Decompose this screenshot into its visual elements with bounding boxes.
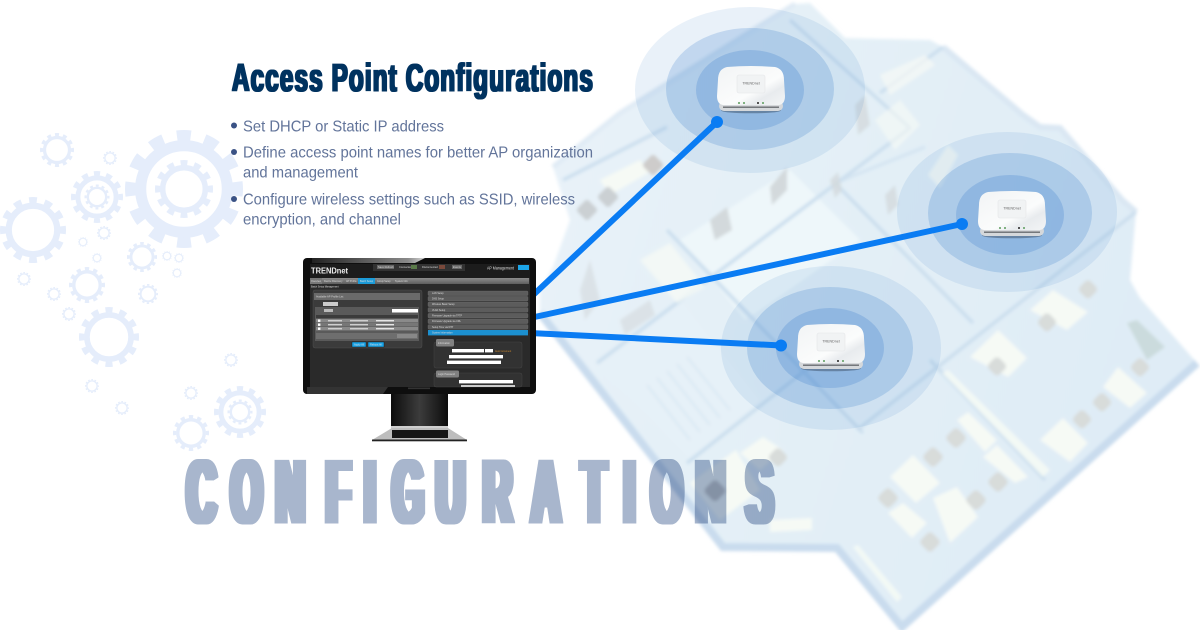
bullet: wireless settings: Configure wireless settings such as SSID, wireless — [243, 192, 575, 208]
connection line to right access point — [530, 218, 968, 318]
monitor stand — [372, 394, 467, 441]
icon: right access point device — [978, 191, 1046, 238]
tab bar: Device Discovery — [324, 280, 343, 283]
page heading: Batch Setup Management — [311, 286, 339, 288]
tab bar: Overview — [311, 280, 321, 283]
tab bar — [310, 278, 529, 284]
tab bar: System Info — [395, 280, 408, 283]
TRENDnet logo: TRENDnet — [311, 266, 348, 276]
bullet: DHCP or static IP: Set DHCP or Static IP address — [243, 118, 444, 136]
bullet: access point names: and management — [243, 164, 359, 182]
right panel: accordion settings: Firmware Upgrade via URL — [432, 320, 462, 323]
screen: software interface — [310, 264, 530, 387]
bullet list — [231, 118, 593, 228]
bullet: access point names — [231, 144, 593, 182]
right panel: accordion settings: Auto Increment — [495, 350, 512, 353]
right panel: accordion settings: VLAN Setup — [432, 309, 446, 312]
left panel: AP profile list — [313, 290, 422, 348]
left panel: AP profile list: Available AP Profile List — [316, 294, 344, 298]
top status strip: Connected — [399, 265, 412, 269]
top status strip: Save Refresh — [378, 265, 394, 269]
monitor bezel — [303, 258, 536, 394]
top status strip: Events — [453, 265, 462, 269]
right panel: accordion settings: Firmware Upgrade via TFTP — [432, 315, 463, 318]
signal rings: top access point — [635, 7, 865, 173]
bullet: wireless settings: encryption, and channel — [243, 212, 401, 228]
right panel: accordion settings: LAN Setup — [432, 292, 444, 295]
AP Management heading: AP Management — [487, 266, 515, 270]
left panel: AP profile list: Reboot All — [370, 342, 382, 346]
tab bar: AP Profile — [346, 280, 357, 283]
right panel: accordion settings: System Information — [432, 332, 453, 335]
tab bar: Batch Setup — [360, 280, 374, 283]
icon: top access point device — [717, 66, 785, 113]
right panel: accordion settings — [428, 291, 528, 387]
logout button — [518, 265, 529, 270]
right panel: accordion settings: Setup Time via NTP — [432, 326, 454, 329]
signal rings: right access point — [897, 132, 1117, 292]
right panel: accordion settings: DNS Setup — [432, 298, 445, 301]
connection line to lower access point — [530, 333, 787, 352]
right panel: accordion settings: Login Password — [438, 373, 456, 376]
bullet: wireless settings — [231, 192, 575, 228]
icon: lower access point device — [797, 324, 865, 371]
top status strip — [373, 264, 465, 271]
left panel: AP profile list: Apply All — [354, 342, 364, 346]
floor plan background — [540, 3, 1197, 627]
monitor with management interface — [303, 258, 536, 441]
connection line to top access point — [530, 116, 723, 298]
background gears — [3, 135, 264, 449]
right panel: accordion settings: Information — [438, 342, 451, 345]
right panel: accordion settings: Wireless Basic Setup — [432, 303, 455, 306]
tab bar: Group Setup — [377, 280, 391, 283]
big watermark word: CONFIGURATIONS: CONFIGURATIONS — [187, 440, 773, 542]
title: Access Point Configurations — [232, 56, 594, 99]
top status strip: Disconnected — [422, 265, 438, 269]
signal rings: lower access point — [721, 266, 941, 430]
bullet: access point names: Define access point names for better AP organization — [243, 144, 593, 162]
